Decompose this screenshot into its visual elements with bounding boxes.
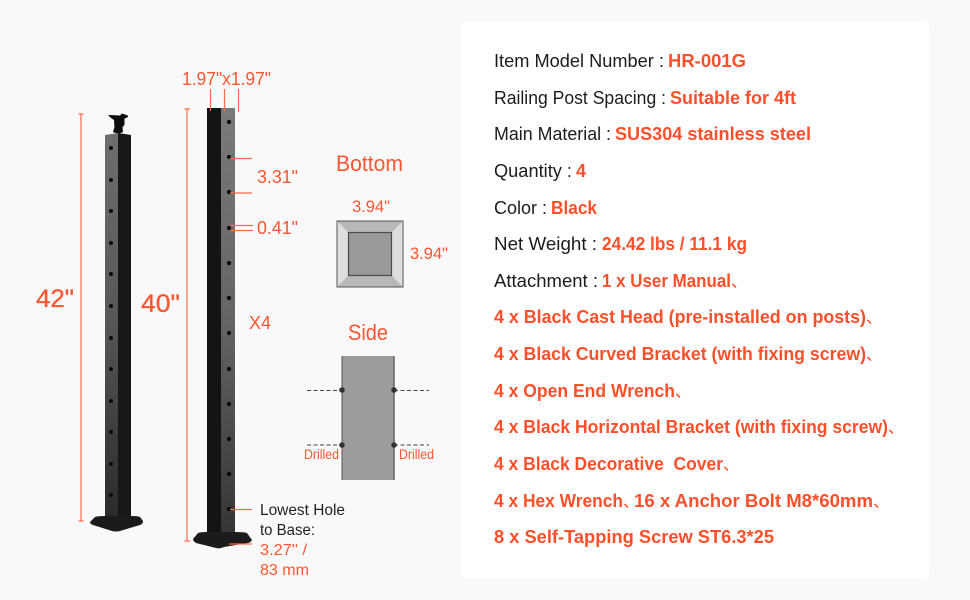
spec: net weight: Net Weight : — [494, 233, 597, 254]
spec: color: Color : — [494, 197, 547, 218]
callout: lowest hole to base — [229, 502, 345, 579]
post base — [90, 516, 143, 532]
icon: cast head — [108, 114, 128, 134]
spec: cast head: 、 — [866, 310, 882, 327]
dimension: 40 inch height — [141, 109, 190, 541]
spec: cast head: 4 x Black Cast Head (pre-installed on posts) — [494, 307, 866, 327]
spec: railing post spacing — [494, 87, 796, 108]
spec: color: Black — [551, 198, 598, 218]
post holes — [109, 146, 113, 497]
spec: main material: SUS304 stainless steel — [615, 124, 811, 144]
dimension: hole diameter 0.41 — [230, 217, 298, 238]
dimension: hole spacing 3.31: 3.31" — [257, 166, 298, 187]
spec: curved bracket: 、 — [866, 347, 882, 364]
left post with head and base — [90, 114, 143, 532]
spec: item model number — [494, 50, 746, 71]
dimension: post width: 1.97"x1.97" — [182, 68, 271, 89]
panel: specifications — [461, 21, 929, 579]
heading: side: Side — [348, 320, 388, 345]
diagram: side view — [304, 356, 434, 480]
spec: railing post spacing: Suitable for 4ft — [670, 88, 796, 108]
dimension: 42 inch height: 42" — [36, 285, 74, 313]
spec: attachment: Attachment : — [494, 270, 598, 291]
dimension: hole diameter 0.41: 0.41" — [257, 217, 298, 238]
spec: net weight: 24.42 lbs / 11.1 kg — [602, 234, 747, 254]
dimension: 42 inch height — [36, 114, 84, 521]
spec: item model number: HR-001G — [668, 51, 746, 71]
spec: self-tapping screw: 8 x Self-Tapping Screw ST6.3*25 — [494, 527, 774, 547]
diagram: bottom plate: 3.94" — [410, 245, 448, 263]
label: quantity x4: X4 — [249, 313, 271, 333]
heading: bottom: Bottom — [336, 151, 403, 176]
spec: railing post spacing: Railing Post Spacing : — [494, 87, 666, 108]
spec: hex wrench and anchor bolt: 、 — [623, 494, 639, 511]
spec: net weight — [494, 233, 747, 254]
spec: hex wrench and anchor bolt: 、 — [873, 494, 889, 511]
spec: horizontal bracket: 、 — [888, 420, 904, 437]
dimension: post width — [182, 68, 271, 112]
post base — [193, 532, 252, 548]
diagram: bottom plate: 3.94" — [352, 198, 390, 216]
callout: lowest hole to base: Lowest Hole — [260, 502, 345, 519]
callout: lowest hole to base: 83 mm — [260, 562, 309, 579]
spec: quantity: Quantity : — [494, 160, 572, 181]
spec: hex wrench and anchor bolt — [494, 491, 889, 511]
post body — [207, 108, 235, 536]
spec: decorative cover: 、 — [723, 457, 739, 474]
dimension: hole spacing 3.31 — [230, 158, 298, 193]
diagram: side view: Drilled — [304, 446, 339, 462]
right post with base — [193, 108, 252, 548]
spec: attachment — [494, 270, 747, 291]
spec: hex wrench and anchor bolt: 4 x Hex Wrench — [494, 491, 623, 511]
spec: color — [494, 197, 598, 218]
spec: main material: Main Material : — [494, 123, 611, 144]
post holes — [227, 120, 231, 511]
callout: lowest hole to base: 3.27'' / — [260, 542, 308, 559]
spec: quantity: 4 — [576, 161, 586, 181]
spec: main material — [494, 123, 811, 144]
callout: lowest hole to base: to Base: — [260, 522, 315, 539]
diagram: side view: Drilled — [399, 446, 434, 462]
spec: open end wrench: 、 — [675, 384, 691, 401]
dimension: 40 inch height: 40" — [141, 290, 180, 318]
spec: horizontal bracket: 4 x Black Horizontal Bracket (with fixing screw) — [494, 417, 888, 437]
spec: open end wrench: 4 x Open End Wrench — [494, 381, 675, 401]
spec: item model number: Item Model Number : — [494, 50, 664, 71]
spec: attachment: 、 — [731, 274, 747, 291]
post body — [105, 133, 131, 520]
spec: hex wrench and anchor bolt: 16 x Anchor Bolt M8*60mm — [634, 491, 873, 511]
spec: curved bracket: 4 x Black Curved Bracket (with fixing screw) — [494, 344, 866, 364]
spec: decorative cover: 4 x Black Decorative Cover — [494, 454, 723, 474]
spec: attachment: 1 x User Manual — [602, 271, 731, 291]
diagram: bottom plate — [337, 198, 448, 287]
